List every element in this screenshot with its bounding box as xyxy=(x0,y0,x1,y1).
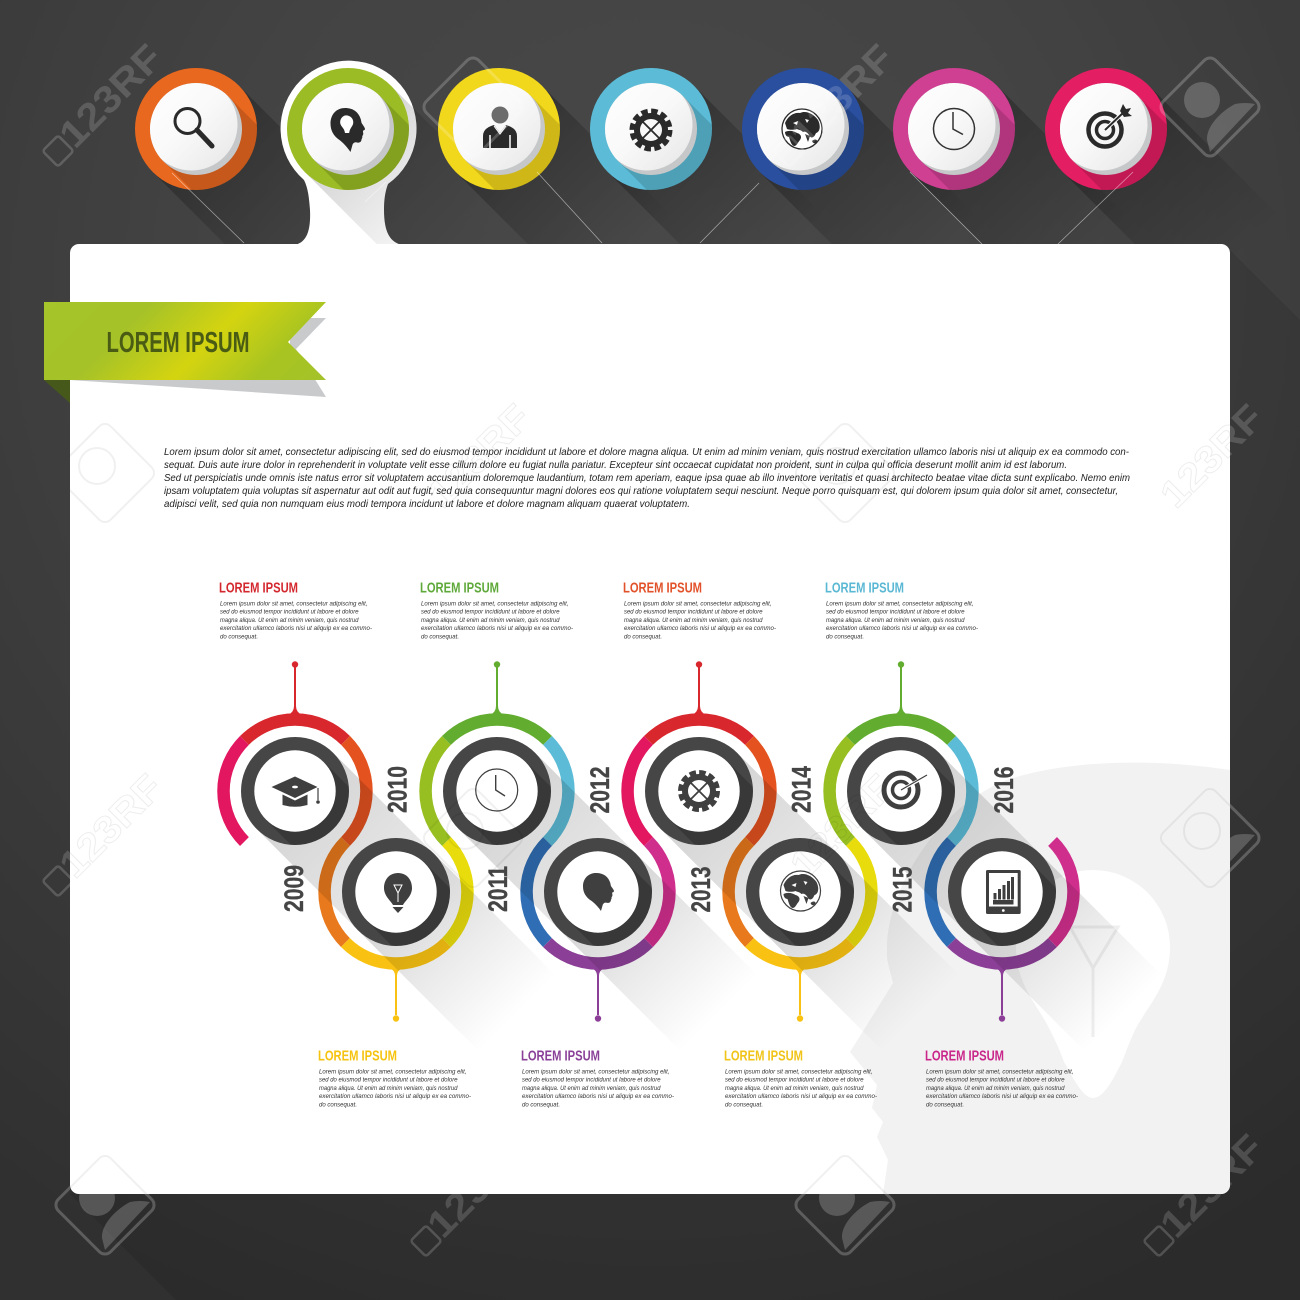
text block: 2009: do consequat. xyxy=(220,634,258,640)
text block: 2016: sed do eiusmod tempor incididunt ut labore et dolore xyxy=(926,1077,1065,1084)
text block: 2012: Lorem ipsum dolor sit amet, consectetur adipiscing elit, xyxy=(522,1068,670,1076)
watermarks over the dark area: 123RF xyxy=(52,37,171,156)
text block: 2013 xyxy=(623,580,776,640)
timeline pins xyxy=(288,661,1009,1022)
intro paragraph xyxy=(164,446,1130,510)
text block: 2013: Lorem ipsum dolor sit amet, consectetur adipiscing elit, xyxy=(624,600,772,608)
top row of coloured discs xyxy=(135,68,1167,190)
intro paragraph: ipsam voluptatem quia voluptas sit aspernatur aut odit aut fugit, sed quia consequuntur magni dolores eos qui ratione voluptatem sequi nesciunt. Neque porro quisquam est, qui dolorem ipsum quia dolor sit amet, consectetur, xyxy=(164,485,1118,497)
year labels: 2016 xyxy=(989,766,1019,814)
watermarks over the white panel: 123RF xyxy=(783,767,902,886)
text block: 2016: do consequat. xyxy=(926,1102,964,1108)
panel long shadow xyxy=(70,250,1300,1300)
watermarks over the white panel: 123RF xyxy=(1153,397,1272,516)
intro paragraph: Lorem ipsum dolor sit amet, consectetur adipiscing elit, sed do eiusmod tempor incididunt ut labore et dolore magna aliqua. Ut enim ad minim veniam, quis nostrud exercitation ullamco laboris nisi ut aliquip ex ea commodo con- xyxy=(164,446,1129,458)
text block: 2014: exercitation ullamco laboris nisi ut aliquip ex ea commo- xyxy=(725,1093,877,1100)
text block: 2010: magna aliqua. Ut enim ad minim veniam, quis nostrud xyxy=(319,1085,458,1092)
year labels: 2009 xyxy=(279,865,309,912)
watermarks over the white panel: 123RF xyxy=(52,767,171,886)
text block: 2012: magna aliqua. Ut enim ad minim veniam, quis nostrud xyxy=(522,1085,661,1092)
text block: 2012: exercitation ullamco laboris nisi ut aliquip ex ea commo- xyxy=(522,1093,674,1100)
coloured timeline ribbon xyxy=(223,719,1074,964)
text block: 2013: LOREM IPSUM xyxy=(623,580,702,596)
text block: 2014: Lorem ipsum dolor sit amet, consectetur adipiscing elit, xyxy=(725,1068,873,1076)
text block: 2011: Lorem ipsum dolor sit amet, consectetur adipiscing elit, xyxy=(421,600,569,608)
icon: gear xyxy=(680,772,718,810)
watermarks over the dark area: 123RF xyxy=(1153,397,1272,516)
text block: 2015: exercitation ullamco laboris nisi ut aliquip ex ea commo- xyxy=(826,625,978,632)
icon: target xyxy=(1088,104,1132,146)
text block: 2010: exercitation ullamco laboris nisi ut aliquip ex ea commo- xyxy=(319,1093,471,1100)
text block: 2014: LOREM IPSUM xyxy=(724,1048,803,1064)
text block: 2009 xyxy=(219,580,372,640)
text block: 2009: sed do eiusmod tempor incididunt ut labore et dolore xyxy=(220,609,359,616)
main white panel xyxy=(70,244,1230,1194)
text block: 2013: sed do eiusmod tempor incididunt ut labore et dolore xyxy=(624,609,763,616)
text block: 2015 xyxy=(825,580,978,640)
icon: head profile xyxy=(583,873,614,911)
watermarks over the dark area: 123RF xyxy=(52,767,171,886)
year labels: 2011 xyxy=(483,866,513,912)
button bases xyxy=(150,83,1152,175)
text block: 2011: magna aliqua. Ut enim ad minim veniam, quis nostrud xyxy=(421,617,560,624)
long shadows of the timeline discs xyxy=(257,753,1162,1052)
ribbon heading xyxy=(44,302,326,403)
year labels: 2010 xyxy=(382,766,412,813)
text block: 2016 xyxy=(925,1048,1078,1108)
icon: graduation cap xyxy=(272,776,320,807)
text block: 2016: Lorem ipsum dolor sit amet, consectetur adipiscing elit, xyxy=(926,1068,1074,1076)
background head silhouette with bulb xyxy=(850,763,1230,1194)
icon: clock xyxy=(476,769,518,811)
text block: 2011: sed do eiusmod tempor incididunt ut labore et dolore xyxy=(421,609,560,616)
text block: 2014 xyxy=(724,1048,877,1108)
text block: 2010: sed do eiusmod tempor incididunt ut labore et dolore xyxy=(319,1077,458,1084)
thin diagonal lines on the dark area xyxy=(172,172,1133,244)
text block: 2010: do consequat. xyxy=(319,1102,357,1108)
text block: 2013: do consequat. xyxy=(624,634,662,640)
text block: 2015: LOREM IPSUM xyxy=(825,580,904,596)
text block: 2016: exercitation ullamco laboris nisi ut aliquip ex ea commo- xyxy=(926,1093,1078,1100)
year labels: 2014 xyxy=(786,766,816,813)
text block: 2014: do consequat. xyxy=(725,1102,763,1108)
text block: 2013: exercitation ullamco laboris nisi ut aliquip ex ea commo- xyxy=(624,625,776,632)
text block: 2009: Lorem ipsum dolor sit amet, consectetur adipiscing elit, xyxy=(220,600,368,608)
year labels: 2015 xyxy=(888,866,918,912)
text block: 2014: sed do eiusmod tempor incididunt ut labore et dolore xyxy=(725,1077,864,1084)
icon: globe xyxy=(782,109,822,149)
text block: 2016: LOREM IPSUM xyxy=(925,1048,1004,1064)
icon: tablet with bars xyxy=(986,870,1021,914)
shadow of the green disc on the head connector xyxy=(305,86,508,289)
text block: 2009: LOREM IPSUM xyxy=(219,580,298,596)
text block: 2015: do consequat. xyxy=(826,634,864,640)
text block: 2012 xyxy=(521,1048,674,1108)
button shadows on the coloured discs xyxy=(164,96,1167,190)
text block: 2015: magna aliqua. Ut enim ad minim veniam, quis nostrud xyxy=(826,617,965,624)
icon: target with arrow xyxy=(884,773,927,807)
text block: 2015: Lorem ipsum dolor sit amet, consectetur adipiscing elit, xyxy=(826,600,974,608)
icon: light bulb xyxy=(384,873,412,913)
text block: 2013: magna aliqua. Ut enim ad minim veniam, quis nostrud xyxy=(624,617,763,624)
text block: 2011: do consequat. xyxy=(421,634,459,640)
icon: globe xyxy=(780,871,820,911)
intro paragraph: Sed ut perspiciatis unde omnis iste natus error sit voluptatem accusantium doloremque laudantium, totam rem aperiam, eaque ipsa quae ab illo inventore veritatis et quasi architecto beatae vitae dicta sunt explicabo. Nemo enim xyxy=(164,472,1130,484)
watermarks over the white panel: 123RF xyxy=(420,397,539,516)
year labels: 2013 xyxy=(686,866,716,912)
watermarks over the dark area: 123RF xyxy=(420,1127,539,1246)
dark timeline rings xyxy=(241,737,1056,946)
long shadows of the top icon row on the background xyxy=(153,86,1280,303)
icon: businessman xyxy=(483,106,517,148)
white button tops xyxy=(146,78,1148,170)
text block: 2009: magna aliqua. Ut enim ad minim veniam, quis nostrud xyxy=(220,617,359,624)
intro paragraph: adipisci velit, sed quia non numquam eius modi tempora incidunt ut labore et dolore magnam aliquam quaerat voluptatem. xyxy=(164,498,690,510)
icon: head with bulb xyxy=(330,108,365,152)
inner shadows on the dark rings xyxy=(266,762,1070,960)
text block: 2011: exercitation ullamco laboris nisi ut aliquip ex ea commo- xyxy=(421,625,573,632)
watermarks over the white panel xyxy=(70,402,1230,1194)
text block: 2015: sed do eiusmod tempor incididunt ut labore et dolore xyxy=(826,609,965,616)
text block: 2010 xyxy=(318,1048,471,1108)
text block: 2010: LOREM IPSUM xyxy=(318,1048,397,1064)
text block: 2011: LOREM IPSUM xyxy=(420,580,499,596)
icon: gear xyxy=(632,111,670,149)
icon: clock xyxy=(934,108,974,150)
text block: 2012: do consequat. xyxy=(522,1102,560,1108)
icon: magnifier xyxy=(175,108,212,146)
text block: 2014: magna aliqua. Ut enim ad minim veniam, quis nostrud xyxy=(725,1085,864,1092)
year labels: 2012 xyxy=(585,766,615,814)
white centres of the rings xyxy=(254,750,1043,933)
watermarks over the dark area: 123RF xyxy=(783,37,902,156)
watermarks over the dark area: 123RF xyxy=(1153,1127,1272,1246)
white head connector above the panel xyxy=(281,61,417,245)
text block: 2016: magna aliqua. Ut enim ad minim veniam, quis nostrud xyxy=(926,1085,1065,1092)
intro paragraph: sequat. Duis aute irure dolor in reprehenderit in voluptate velit esse cillum dolore eu fugiat nulla pariatur. Excepteur sint occaecat cupidatat non proident, sunt in culpa qui officia deserunt mollit anim id est laborum. xyxy=(164,459,1067,471)
ribbon heading: LOREM IPSUM xyxy=(106,327,250,359)
year labels xyxy=(279,766,1019,912)
text block: 2012: LOREM IPSUM xyxy=(521,1048,600,1064)
text block: 2010: Lorem ipsum dolor sit amet, consectetur adipiscing elit, xyxy=(319,1068,467,1076)
text block: 2011 xyxy=(420,580,573,640)
text block: 2012: sed do eiusmod tempor incididunt ut labore et dolore xyxy=(522,1077,661,1084)
text block: 2009: exercitation ullamco laboris nisi ut aliquip ex ea commo- xyxy=(220,625,372,632)
